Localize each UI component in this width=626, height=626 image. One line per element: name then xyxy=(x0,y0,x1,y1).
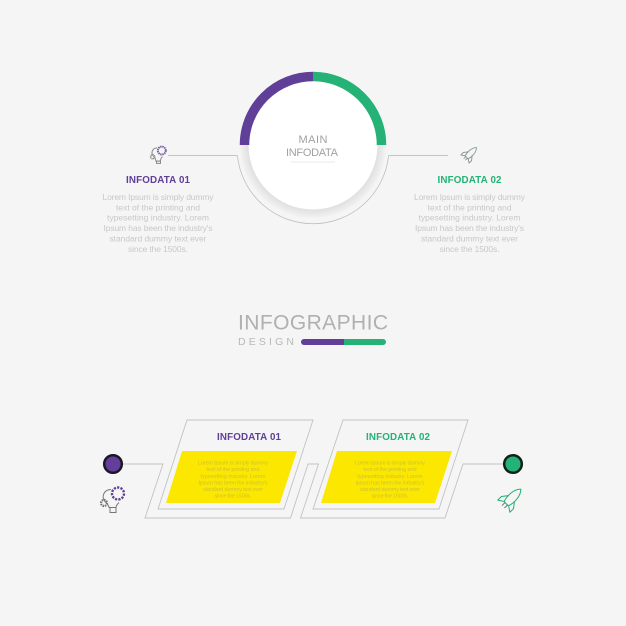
subtitle: DESIGN xyxy=(238,336,294,348)
body text: Ipsum has been the industry's xyxy=(356,480,425,486)
connector 01 xyxy=(122,464,504,518)
card outline xyxy=(158,420,313,509)
yellow box xyxy=(321,451,452,503)
body text: text of the printing and xyxy=(206,467,260,473)
body text xyxy=(355,460,425,500)
body text: standard dummy text ever xyxy=(110,234,207,244)
yellow box xyxy=(166,451,297,503)
body text: standard dummy text ever xyxy=(421,234,518,244)
ring segment: purple xyxy=(244,76,313,145)
body text: Ipsum has been the industry's xyxy=(415,223,524,233)
icon: rocket xyxy=(497,483,527,513)
body text: typesetting industry. Lorem xyxy=(200,474,266,480)
title text: INFOGRAPHIC xyxy=(238,312,388,334)
center label: MAIN xyxy=(298,134,328,146)
card outline xyxy=(313,420,468,509)
heading: INFODATA 01 xyxy=(217,432,282,443)
body text: typesetting industry. Lorem xyxy=(358,474,423,480)
panel: infodata 01 (top) xyxy=(102,147,237,254)
center underline xyxy=(291,161,335,163)
icon: bulb and gear xyxy=(101,488,124,512)
center label xyxy=(286,134,339,159)
body text: Ipsum has been the industry's xyxy=(198,480,268,486)
body text: standard dummy text ever xyxy=(360,487,420,493)
dot: green xyxy=(504,455,522,473)
body text: Lorem Ipsum is simply dummy xyxy=(414,192,526,202)
heading: INFODATA 01 xyxy=(126,175,191,186)
body text xyxy=(102,192,214,254)
body text: Ipsum has been the industry's xyxy=(104,223,212,233)
body text: Lorem Ipsum is simply dummy xyxy=(102,192,214,202)
body text: since the 1500s. xyxy=(440,244,500,254)
body text: since the 1500s. xyxy=(372,494,409,500)
icon: bulb and gear small xyxy=(151,147,166,163)
circle shadow xyxy=(240,145,386,218)
body text: text of the printing and xyxy=(428,202,512,212)
panel: main circle xyxy=(237,76,389,224)
heading: INFODATA 02 xyxy=(366,432,431,443)
outer thin arc xyxy=(237,156,389,224)
body text: since the 1500s. xyxy=(128,244,188,254)
body text xyxy=(198,460,268,500)
title bar xyxy=(301,339,386,345)
body text: standard dummy text ever xyxy=(203,487,263,493)
connector left xyxy=(168,154,237,156)
body text: typesetting industry. Lorem xyxy=(107,212,209,222)
panel: connector outlines xyxy=(122,464,504,518)
connector right xyxy=(389,154,448,156)
body text: Lorem Ipsum is simply dummy xyxy=(198,460,268,466)
body text: typesetting industry. Lorem xyxy=(418,212,520,222)
white disc xyxy=(248,80,378,210)
heading: INFODATA 02 xyxy=(438,175,502,186)
body text xyxy=(414,192,526,254)
panel: card 02 xyxy=(313,420,468,509)
panel: card 01 xyxy=(158,420,313,509)
center label: INFODATA xyxy=(286,147,339,159)
ring segment: green xyxy=(313,76,382,145)
panel: infodata 02 (top) xyxy=(389,143,526,254)
body text: text of the printing and xyxy=(364,467,416,473)
body text: Lorem Ipsum is simply dummy xyxy=(355,460,425,466)
dot: purple xyxy=(104,455,122,473)
title xyxy=(238,312,388,348)
icon: rocket small xyxy=(460,143,481,164)
body text: text of the printing and xyxy=(116,202,200,212)
body text: since the 1500s. xyxy=(214,494,252,500)
